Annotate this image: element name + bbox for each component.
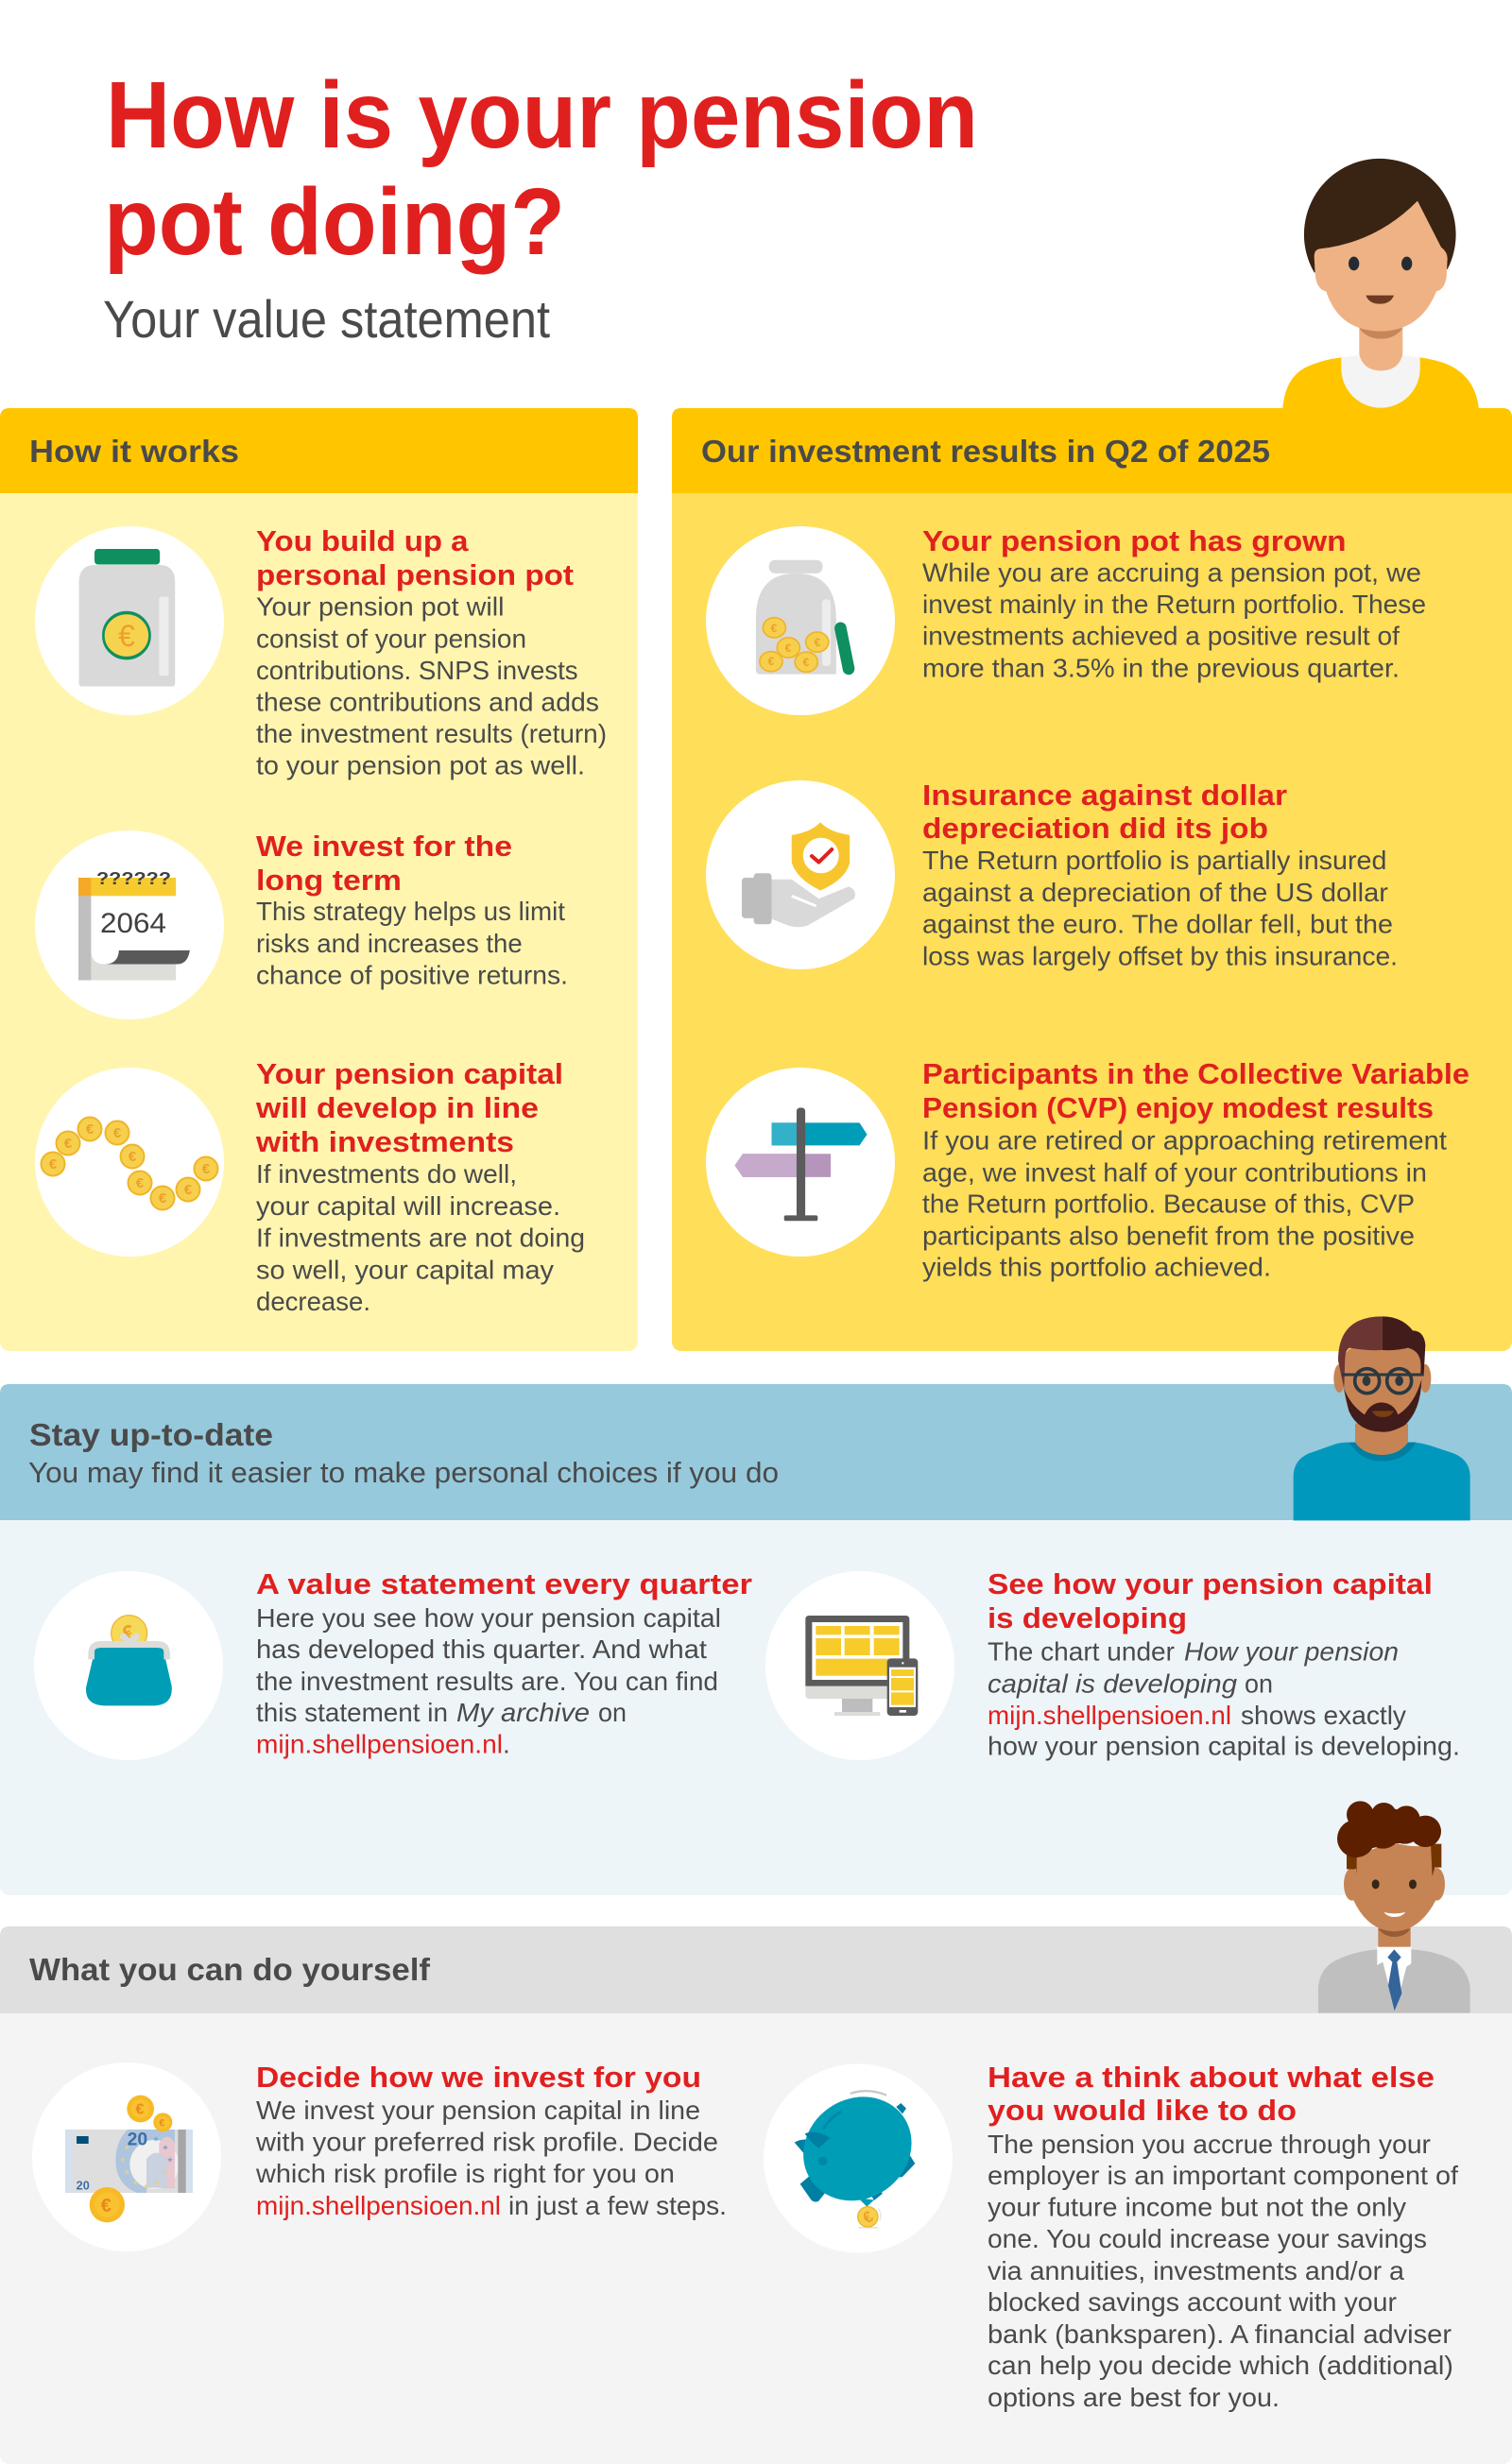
- text: we invest for the long term: We invest for the: [256, 830, 512, 863]
- subtitle: Your value statement: [103, 289, 550, 349]
- icon: wave of euro coins: €: [184, 1182, 193, 1198]
- icon: piggy bank tipped over: [764, 2063, 953, 2252]
- text: your pension capital will develop in line with investments: will develop in line: [255, 1091, 539, 1124]
- icon: euro banknote and coins: ★: [124, 2167, 130, 2176]
- person: woman in yellow: [1282, 159, 1479, 409]
- text: have a think about what else: [988, 2061, 1458, 2412]
- icon: euro banknote and coins: ★: [143, 2182, 150, 2190]
- icon: wave of euro coins: €: [136, 1175, 145, 1191]
- text: we invest for the long term: chance of positive returns.: [256, 960, 568, 990]
- panel: stay up-to-date: [0, 1384, 1512, 1895]
- text: you build up a personal pension pot: consist of your pension: [256, 624, 526, 654]
- icon: purse with coin: €: [117, 1619, 141, 1647]
- text: you build up a personal pension pot: personal pension pot: [256, 558, 574, 591]
- icon: piggy bank tipped over: €: [860, 2207, 876, 2227]
- icon: jar with euro coin: [35, 526, 224, 715]
- icon: euro banknote and coins: ★: [154, 2178, 161, 2186]
- text: insurance against dollar depreciation: loss was largely offset by this insurance.: [922, 941, 1398, 971]
- heading: investment results in Q2 of 2025: Our investment results in Q2 of 2025: [701, 434, 1270, 469]
- icon: euro banknote and coins: ★: [119, 2156, 126, 2165]
- text: see how your pension capital is developing: on: [1245, 1668, 1273, 1699]
- text: your pension pot has grown: invest mainly in the Return portfolio. These: [922, 590, 1426, 619]
- text: a value statement every quarter: on: [598, 1698, 627, 1727]
- text: have a think about what else: bank (banksparen). A financial adviser: [988, 2319, 1452, 2349]
- text: your pension capital will develop in line with investments: decrease.: [256, 1287, 370, 1316]
- icon: euro banknote and coins: ★: [162, 2167, 169, 2176]
- text: your pension capital will develop in line with investments: so well, your capital may: [256, 1255, 554, 1285]
- text: see how your pension capital is developing: capital is developing: [988, 1668, 1237, 1699]
- text: your pension pot has grown: investments achieved a positive result of: [922, 622, 1400, 650]
- text: your pension capital will develop in line with investments: with investments: [255, 1125, 514, 1158]
- heading: how it works: How it works: [29, 434, 239, 469]
- icon: euro banknote and coins: €: [136, 2102, 145, 2118]
- title: How is your pension: [106, 62, 978, 168]
- text: have a think about what else: your future income but not the only: [988, 2192, 1406, 2222]
- text: decide how we invest for you: mijn.shellpensioen.nl: [256, 2191, 501, 2220]
- title: pot doing?: [104, 169, 565, 275]
- icon: wave of euro coins: €: [129, 1149, 137, 1165]
- text: participants in the collective variable pension: participants also benefit from the positive: [922, 1221, 1415, 1251]
- text: have a think about what else: Have a think about what else: [988, 2061, 1435, 2094]
- icon: euro banknote and coins: [32, 2062, 221, 2251]
- icon: wave of euro coins: €: [202, 1161, 211, 1177]
- icon: euro banknote and coins: €: [101, 2196, 112, 2216]
- text: you build up a personal pension pot: You build up a: [256, 524, 469, 557]
- text: decide how we invest for you: We invest your pension capital in line: [256, 2096, 700, 2125]
- text: insurance against dollar depreciation: [922, 779, 1398, 971]
- text: decide how we invest for you: in just a few steps.: [508, 2191, 727, 2220]
- text: we invest for the long term: This strategy helps us limit: [256, 897, 565, 926]
- heading: what you can do yourself: What you can do yourself: [29, 1952, 431, 1987]
- text: have a think about what else: via annuities, investments and/or a: [988, 2256, 1404, 2285]
- text: have a think about what else: options are best for you.: [988, 2383, 1280, 2412]
- icon: open jar with coins: [706, 526, 895, 715]
- icon: euro banknote and coins: ★: [132, 2178, 139, 2186]
- text: participants in the collective variable pension: yields this portfolio achieved.: [922, 1253, 1271, 1281]
- text: a value statement every quarter: .: [503, 1729, 510, 1759]
- heading: stay up-to-date: Stay up-to-date: [29, 1417, 273, 1452]
- text: see how your pension capital is developing: How your pension: [1184, 1636, 1399, 1667]
- text: have a think about what else: employer is an important component of: [988, 2161, 1458, 2190]
- text: your pension pot has grown: more than 3.5% in the previous quarter.: [922, 654, 1400, 682]
- icon: euro banknote and coins: 20: [77, 2180, 90, 2193]
- icon: calendar 2064: ??????: [96, 869, 171, 888]
- heading: stay up-to-date: [28, 1417, 779, 1489]
- icon: open jar with coins: €: [785, 642, 792, 655]
- title: [104, 62, 978, 275]
- text: your pension capital will develop in line with investments: your capital will increase.: [256, 1191, 560, 1221]
- text: a value statement every quarter: has developed this quarter. And what: [256, 1634, 707, 1664]
- icon: signpost: [706, 1068, 895, 1257]
- icon: jar with euro coin: €: [118, 619, 135, 653]
- icon: wave of euro coins: €: [159, 1190, 167, 1206]
- text: you build up a personal pension pot: contributions. SNPS invests: [256, 656, 578, 685]
- icon: wave of euro coins: €: [49, 1156, 58, 1172]
- text: participants in the collective variable pension: If you are retired or approaching retirement: [922, 1126, 1447, 1155]
- text: insurance against dollar depreciation: Insurance against dollar: [922, 779, 1287, 812]
- icon: wave of euro coins: €: [113, 1125, 122, 1141]
- text: a value statement every quarter: the investment results are. You can find: [256, 1667, 718, 1696]
- text: you build up a personal pension pot: to your pension pot as well.: [256, 750, 585, 780]
- text: insurance against dollar depreciation: against the euro. The dollar fell, but the: [922, 909, 1393, 939]
- icon: euro banknote and coins: ★: [162, 2143, 169, 2151]
- icon: open jar with coins: €: [771, 622, 778, 635]
- text: have a think about what else: one. You could increase your savings: [988, 2224, 1427, 2253]
- panel: what you can do yourself: [0, 1926, 1512, 2464]
- icon: calendar 2064: [35, 830, 224, 1019]
- text: you build up a personal pension pot: [256, 524, 607, 780]
- icon: wave of euro coins: €: [64, 1136, 73, 1152]
- icon: open jar with coins: €: [815, 636, 821, 649]
- text: see how your pension capital is developing: is developing: [988, 1601, 1187, 1634]
- text: a value statement every quarter: mijn.shellpensioen.nl: [256, 1729, 503, 1759]
- text: insurance against dollar depreciation: depreciation did its job: [922, 812, 1268, 845]
- text: you build up a personal pension pot: Your pension pot will: [256, 591, 505, 622]
- icon: purse with coin: [34, 1571, 223, 1760]
- text: your pension capital will develop in line with investments: [255, 1057, 585, 1316]
- icon: calendar 2064: 2064: [100, 908, 166, 939]
- text: participants in the collective variable pension: the Return portfolio. Because of this, CVP: [922, 1189, 1415, 1219]
- text: participants in the collective variable pension: Pension (CVP) enjoy modest results: [922, 1091, 1434, 1124]
- text: we invest for the long term: risks and increases the: [256, 929, 523, 958]
- icon: monitor and phone: [765, 1571, 954, 1760]
- text: your pension capital will develop in line with investments: Your pension capital: [256, 1057, 563, 1090]
- icon: euro banknote and coins: ★: [166, 2156, 174, 2165]
- text: have a think about what else: blocked savings account with your: [988, 2287, 1397, 2317]
- text: have a think about what else: you would like to do: [988, 2094, 1297, 2127]
- icon: hand holding shield: [706, 780, 895, 969]
- text: participants in the collective variable pension: age, we invest half of your contributions in: [922, 1158, 1427, 1187]
- text: participants in the collective variable pension: Participants in the Collective Variable: [922, 1057, 1469, 1090]
- text: a value statement every quarter: My archive: [456, 1698, 590, 1727]
- text: your pension capital will develop in line with investments: If investments do well,: [256, 1159, 517, 1189]
- text: decide how we invest for you: Decide how we invest for you: [256, 2061, 701, 2094]
- text: insurance against dollar depreciation: The Return portfolio is partially insured: [922, 846, 1387, 875]
- icon: euro banknote and coins: 20: [128, 2130, 147, 2150]
- icon: open jar with coins: €: [803, 656, 810, 669]
- icon: open jar with coins: €: [768, 655, 775, 668]
- text: we invest for the long term: long term: [256, 864, 402, 897]
- heading: stay up-to-date: You may find it easier to make personal choices if you do: [28, 1456, 779, 1489]
- text: you build up a personal pension pot: the investment results (return): [256, 719, 607, 748]
- text: your pension pot has grown: Your pension pot has grown: [922, 524, 1346, 557]
- text: your pension capital will develop in line with investments: If investments are not doing: [256, 1223, 585, 1253]
- panel: our investment results: [672, 408, 1512, 1351]
- text: have a think about what else: can help you decide which (additional): [988, 2351, 1453, 2380]
- icon: wave of euro coins: €: [86, 1121, 94, 1138]
- text: insurance against dollar depreciation: against a depreciation of the US dollar: [922, 878, 1388, 907]
- text: we invest for the long term: [256, 830, 568, 990]
- text: participants in the collective variable pension: [922, 1057, 1469, 1281]
- text: your pension pot has grown: [922, 524, 1426, 682]
- icon: euro banknote and coins: ★: [152, 2134, 160, 2143]
- text: see how your pension capital is developing: mijn.shellpensioen.nl: [988, 1701, 1231, 1730]
- text: your pension pot has grown: While you are accruing a pension pot, we: [922, 557, 1421, 588]
- text: see how your pension capital is developing: shows exactly: [1241, 1701, 1406, 1730]
- text: decide how we invest for you: [255, 2061, 727, 2220]
- icon: euro banknote and coins: €: [159, 2117, 164, 2129]
- text: a value statement every quarter: Here you see how your pension capital: [256, 1603, 721, 1633]
- text: see how your pension capital is developing: The chart under: [988, 1636, 1175, 1667]
- text: a value statement every quarter: A value statement every quarter: [256, 1567, 752, 1600]
- text: decide how we invest for you: with your preferred risk profile. Decide: [255, 2128, 718, 2156]
- icon: euro banknote and coins: ★: [124, 2144, 130, 2152]
- text: see how your pension capital is developing: [988, 1567, 1460, 1761]
- text: a value statement every quarter: this statement in: [256, 1698, 448, 1727]
- text: see how your pension capital is developing: See how your pension capital: [988, 1567, 1433, 1600]
- person: bearded man in blue: [1294, 1316, 1470, 1520]
- text: see how your pension capital is developing: how your pension capital is developing.: [988, 1731, 1460, 1761]
- text: a value statement every quarter: [256, 1567, 752, 1759]
- text: decide how we invest for you: which risk profile is right for you on: [255, 2159, 675, 2188]
- person: curly-haired man in grey suit: [1318, 1801, 1470, 2013]
- panel: how it works: [0, 408, 638, 1351]
- icon: wave of euro coins: [35, 1068, 224, 1257]
- text: have a think about what else: The pension you accrue through your: [988, 2130, 1431, 2159]
- text: you build up a personal pension pot: these contributions and adds: [256, 688, 599, 716]
